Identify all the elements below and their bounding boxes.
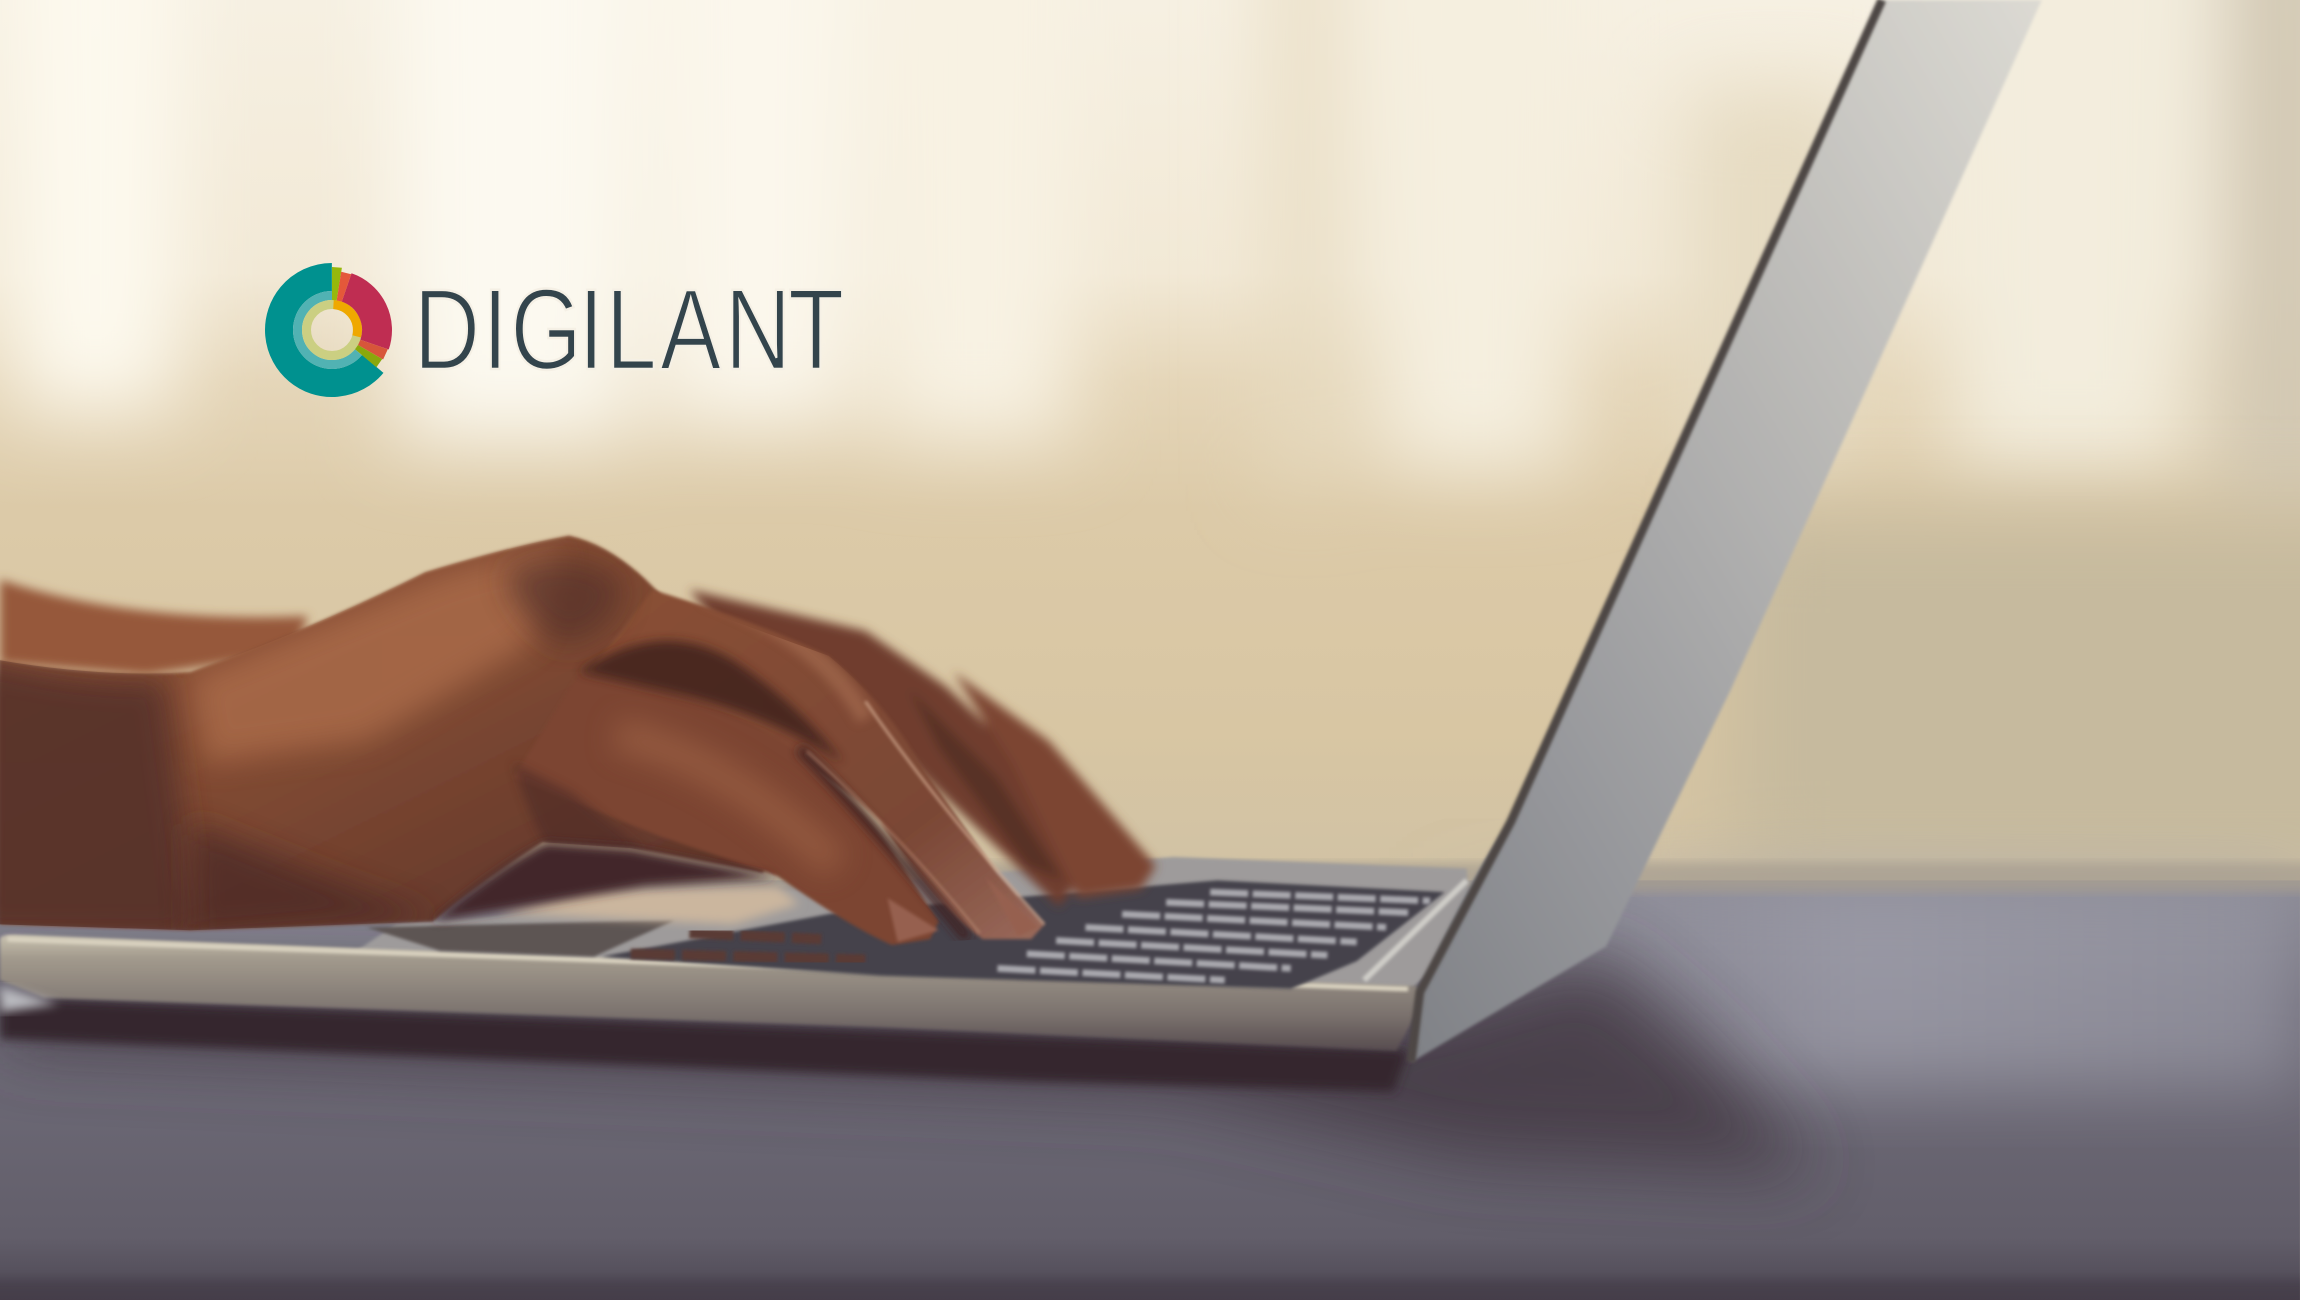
trackpad [367,920,675,957]
laptop shadow on table [0,954,1819,1174]
front hand [0,536,1044,945]
blurred wall and curtains [0,0,2300,910]
middle finger [587,590,1044,939]
shadow under palm [433,842,777,921]
laptop lid [1411,0,2042,1062]
table surface [0,863,2300,1300]
index finger [513,672,939,945]
icon: segmented donut [257,255,407,405]
palm and wrist [0,536,792,930]
bottom vignette [0,1279,2300,1300]
logo: Digilant [257,255,844,405]
finger highlights and nails [807,701,1044,942]
laptop base [0,857,1470,1092]
hand shading [0,546,968,939]
wordmark: DIGILANT [414,266,844,394]
back hand [0,580,1156,907]
keyboard [601,880,1445,989]
